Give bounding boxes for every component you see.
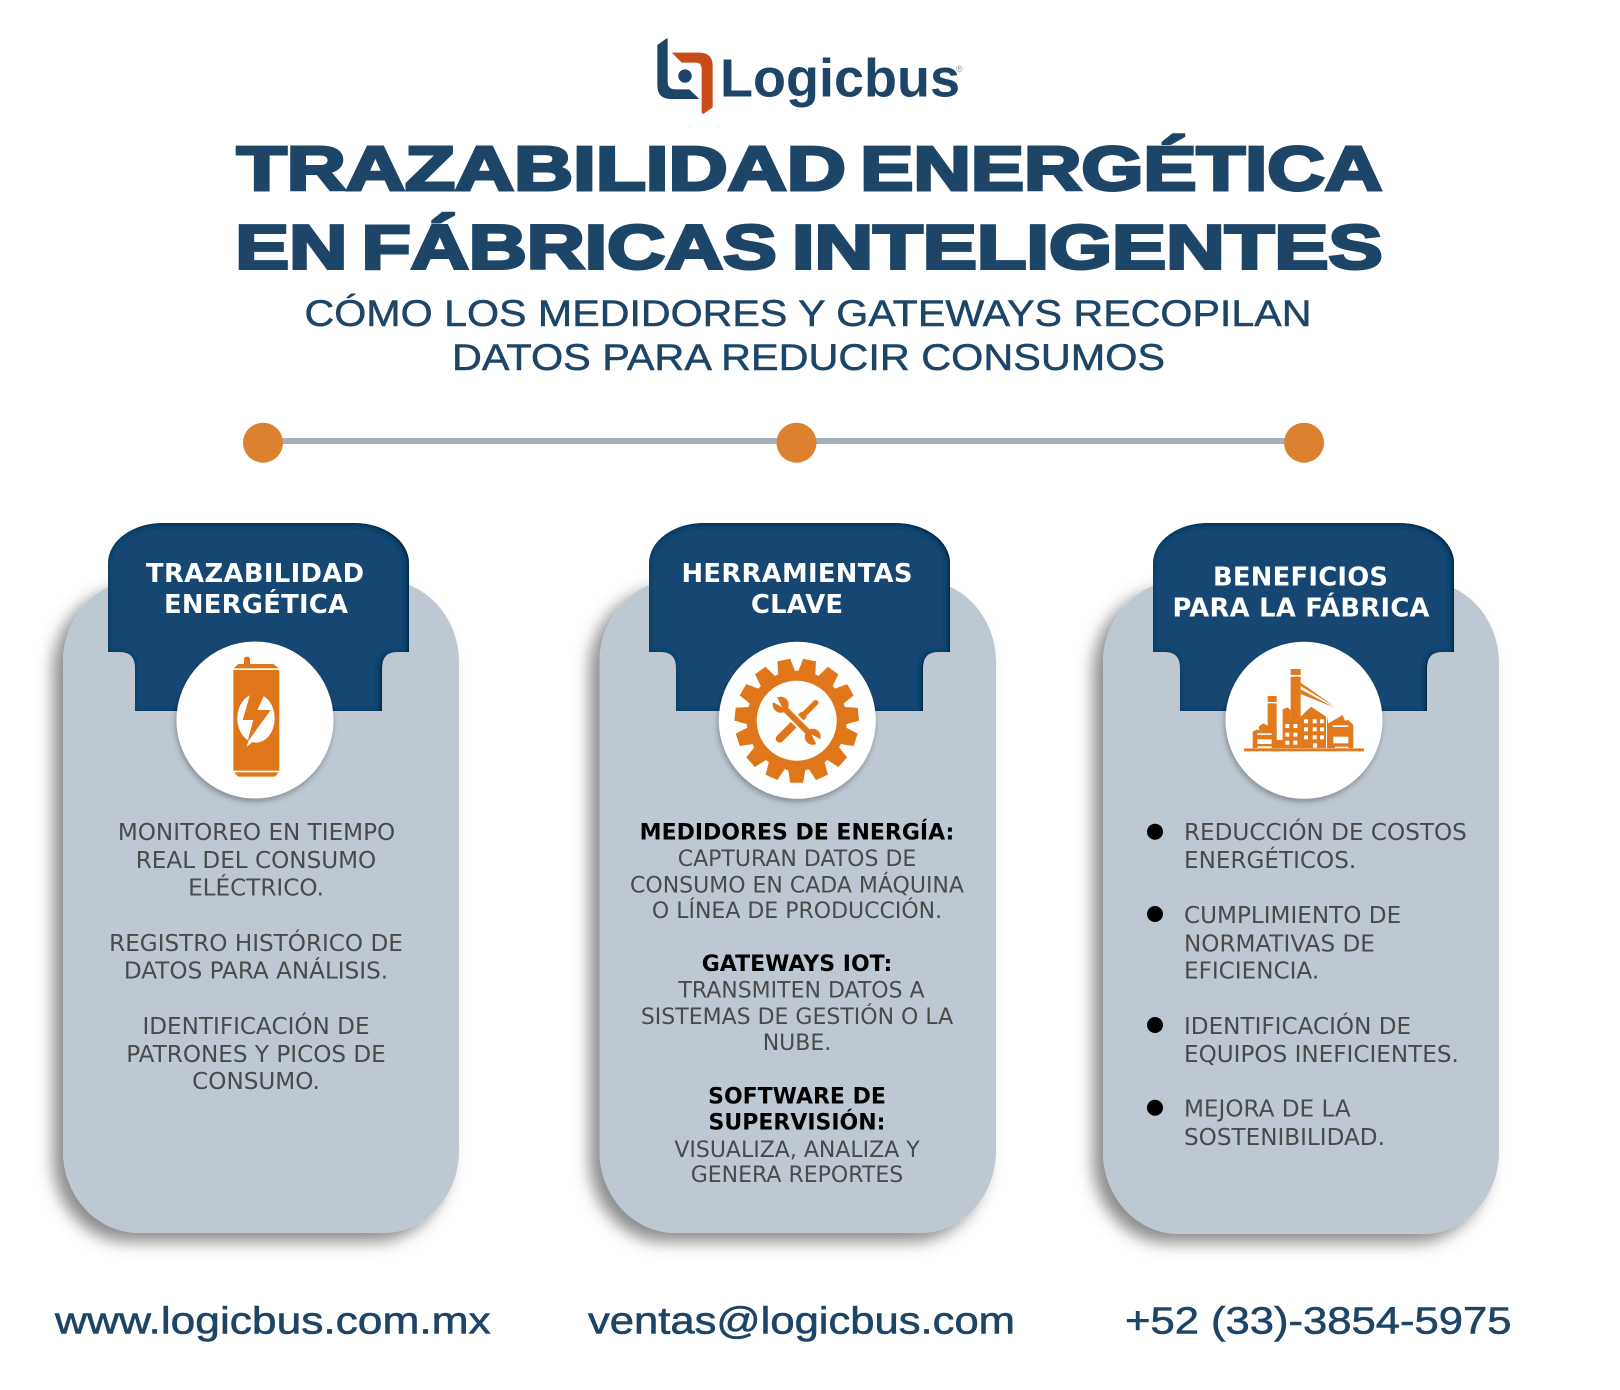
- tab heading: HERRAMIENTAS: [682, 559, 912, 589]
- body text: DATOS PARA ANÁLISIS.: [124, 956, 388, 984]
- bullet 3: [1147, 1017, 1163, 1033]
- icon: battery: [233, 657, 279, 777]
- timeline dot 3: [1284, 423, 1324, 463]
- list item 2: CUMPLIMIENTO DE: [1184, 903, 1401, 929]
- list item 2: EFICIENCIA.: [1184, 958, 1319, 984]
- list item 1: REDUCCIÓN DE COSTOS: [1184, 818, 1467, 846]
- logo wordmark: Logicbus: [720, 49, 960, 109]
- body text: TRANSMITEN DATOS A: [677, 979, 925, 1004]
- logo: Logicbus: [657, 38, 963, 114]
- body list: [1147, 818, 1467, 1151]
- list item 3: [1184, 1012, 1459, 1068]
- tab heading: TRAZABILIDAD: [146, 559, 364, 589]
- list item 4: MEJORA DE LA: [1184, 1097, 1351, 1123]
- body text: GENERA REPORTES: [691, 1163, 903, 1188]
- tab heading: [108, 523, 409, 711]
- body text: VISUALIZA, ANALIZA Y: [674, 1138, 920, 1163]
- list item 1: [1184, 818, 1467, 874]
- body text: PATRONES Y PICOS DE: [126, 1042, 386, 1068]
- list item 4: [1184, 1097, 1385, 1151]
- list item 3: EQUIPOS INEFICIENTES.: [1184, 1042, 1459, 1068]
- tab heading: [649, 523, 950, 711]
- card background: [1103, 581, 1499, 1234]
- body text: IDENTIFICACIÓN DE: [142, 1012, 370, 1040]
- bullet 2: [1147, 906, 1163, 922]
- body text: ELÉCTRICO.: [188, 874, 324, 902]
- icon: gear with tools: [734, 658, 859, 783]
- tab heading: PARA LA FÁBRICA: [1172, 592, 1430, 624]
- body text: SOFTWARE DE: [708, 1085, 886, 1110]
- card background: [600, 580, 996, 1233]
- title: TRAZABILIDAD: [237, 135, 846, 204]
- title: ENERGÉTICA: [860, 135, 1382, 204]
- list item 3: IDENTIFICACIÓN DE: [1184, 1012, 1411, 1040]
- title: [235, 135, 1383, 282]
- icon circle: [1226, 642, 1382, 799]
- list item 2: [1184, 903, 1401, 984]
- body text: CONSUMO EN CADA MÁQUINA: [630, 873, 964, 899]
- body text: MONITOREO EN TIEMPO: [118, 820, 395, 846]
- body text: REAL DEL CONSUMO: [136, 848, 376, 874]
- panel: herramientas clave: [600, 523, 996, 1233]
- tab heading: [1153, 523, 1454, 711]
- card background: [63, 580, 459, 1233]
- body text: SISTEMAS DE GESTIÓN O LA: [641, 1004, 953, 1030]
- icon circle: [719, 642, 876, 799]
- footer contact: email: ventas@logicbus.com: [588, 1301, 1015, 1343]
- list item 1: ENERGÉTICOS.: [1184, 846, 1356, 874]
- body text: SUPERVISIÓN:: [709, 1110, 885, 1136]
- body text: REGISTRO HISTÓRICO DE: [109, 929, 403, 957]
- subtitle: [304, 293, 1312, 378]
- footer contact: website: www.logicbus.com.mx: [54, 1301, 491, 1343]
- timeline dot 2: [776, 423, 816, 463]
- title: INTELIGENTES: [792, 214, 1383, 282]
- bullet 1: [1147, 824, 1163, 840]
- body text: O LÍNEA DE PRODUCCIÓN.: [652, 898, 942, 924]
- subtitle: DATOS PARA REDUCIR CONSUMOS: [452, 337, 1165, 378]
- body text: [630, 819, 964, 1188]
- icon: factory: [1244, 669, 1364, 751]
- logo mark: [657, 38, 713, 114]
- title: EN: [235, 214, 347, 282]
- title: FÁBRICAS: [362, 214, 777, 282]
- body text: GATEWAYS IOT:: [702, 952, 892, 977]
- body text: NUBE.: [763, 1031, 831, 1056]
- body text: CAPTURAN DATOS DE: [678, 847, 916, 872]
- tab heading: CLAVE: [751, 590, 843, 620]
- bullet 4: [1147, 1100, 1163, 1116]
- list item 4: SOSTENIBILIDAD.: [1184, 1125, 1385, 1151]
- list item 2: NORMATIVAS DE: [1184, 932, 1375, 958]
- body text: CONSUMO.: [192, 1069, 320, 1095]
- registered mark: ®: [956, 64, 963, 74]
- subtitle: CÓMO LOS MEDIDORES Y GATEWAYS RECOPILAN: [304, 293, 1312, 334]
- timeline dot 1: [243, 423, 283, 463]
- body text: MEDIDORES DE ENERGÍA:: [640, 819, 954, 845]
- panel: beneficios para la fábrica: [1103, 523, 1499, 1234]
- tab heading: BENEFICIOS: [1213, 562, 1388, 592]
- panel: trazabilidad energética: [63, 523, 459, 1233]
- timeline connector: [243, 423, 1324, 463]
- icon circle: [176, 642, 334, 798]
- tab heading: ENERGÉTICA: [164, 588, 348, 620]
- footer contact: phone: +52 (33)-3854-5975: [1125, 1301, 1512, 1343]
- body text: [109, 820, 403, 1095]
